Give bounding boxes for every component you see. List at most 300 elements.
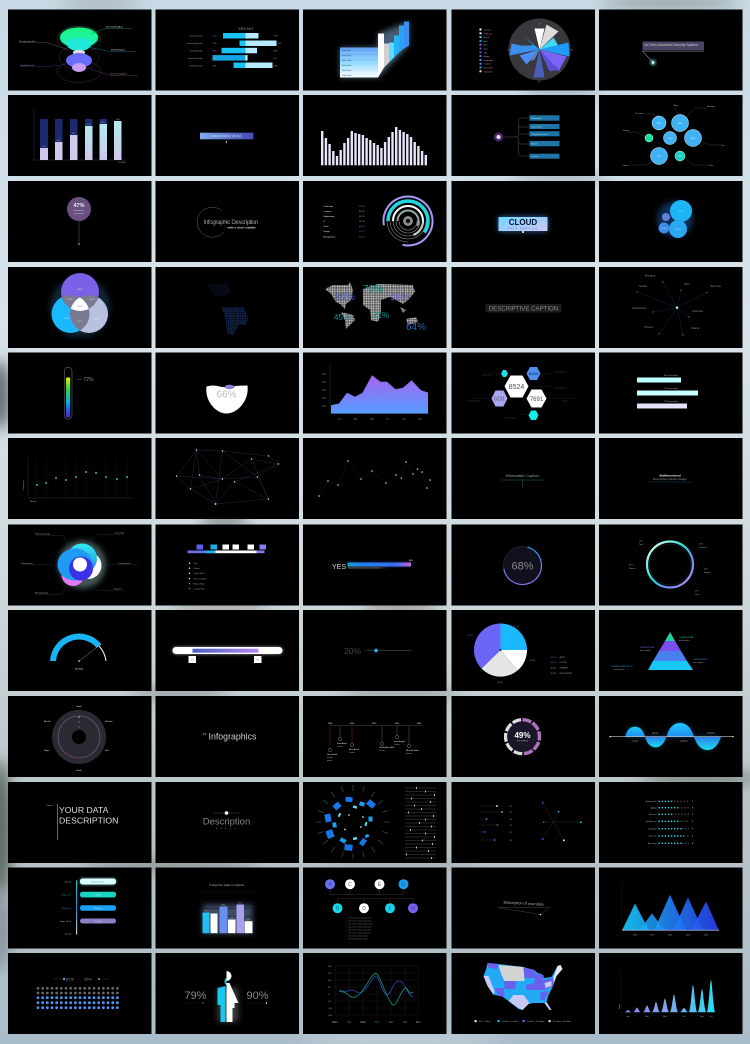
- table: Data Point: [342, 74, 352, 77]
- month labels: Oct: [709, 1015, 713, 1018]
- dot rows: 8: [692, 807, 694, 809]
- pin: Infographics: [74, 210, 84, 212]
- panel: triangle peaks chart: [599, 868, 742, 948]
- percentages: 96%: [390, 292, 410, 303]
- venn: 521.9: [64, 318, 70, 320]
- legend: 36%: [84, 976, 92, 982]
- panel: rose chart: 73: [538, 24, 541, 26]
- month labels: Sep: [700, 1016, 705, 1018]
- labels: 100: [328, 980, 332, 982]
- panel: bubble cluster: [599, 95, 742, 176]
- panel: bubble cluster: 90%: [657, 156, 661, 158]
- panel: rose chart: 88: [570, 50, 574, 52]
- boxes: [530, 115, 560, 159]
- labels: Agility: [651, 806, 656, 809]
- notes: text content: [693, 661, 704, 664]
- axis: Sep: [402, 418, 406, 420]
- pill: [172, 647, 282, 654]
- labels: Thu: [375, 1020, 380, 1024]
- legend: 28.2%: [550, 662, 556, 664]
- captions: Lorem: [379, 750, 385, 752]
- panel: bowl 66%: [156, 352, 299, 434]
- panel: wave chart: [599, 696, 742, 777]
- table: 77.2%: [359, 206, 365, 208]
- bubbles: 61.1%: [675, 229, 681, 231]
- captions: Christopher Mark: [379, 746, 394, 749]
- divider: [56, 804, 58, 840]
- axes: Frequency: [23, 481, 25, 490]
- title: 3 How the sales is shared: [209, 883, 244, 887]
- legend: 5 million - 10 million: [526, 1021, 544, 1023]
- labels: Augmented: [646, 800, 656, 803]
- bar: Growth increases data over this time: [348, 566, 381, 569]
- map: [325, 282, 418, 329]
- tags: 5%: [191, 660, 194, 662]
- bars: 76% description: [664, 400, 678, 403]
- boxes: Internet: [532, 155, 539, 158]
- caption box: 1st Tech Advanced Security System: [644, 43, 698, 47]
- timeline bar: [188, 550, 264, 553]
- needle: 75.5%: [75, 667, 84, 671]
- venn: [52, 273, 108, 333]
- bars: 96%: [116, 119, 120, 121]
- peaks: [622, 895, 719, 936]
- axes: Months: [30, 500, 37, 503]
- bars: 85% description: [664, 374, 678, 377]
- label: YES: [332, 564, 346, 571]
- legend: December: [484, 71, 493, 73]
- axis: 100%: [707, 731, 715, 735]
- axis: Sales: [619, 1004, 621, 1009]
- value: — 72%: [77, 377, 94, 383]
- connectors: [330, 890, 413, 902]
- notes: LOREM IPSUM: [693, 659, 707, 661]
- legend: WOODPRINT: [560, 673, 573, 675]
- callouts: Recycle: [114, 588, 122, 590]
- caption: Multifunctional: [659, 474, 681, 478]
- bars: 39%: [246, 920, 251, 922]
- labels: Fri: [389, 1020, 393, 1024]
- callouts: [21, 532, 138, 594]
- bubbles: 70.2%: [678, 211, 684, 213]
- labels: 200: [328, 966, 332, 968]
- panel: bubble cluster: Text Item: [635, 112, 643, 115]
- thermometer: [64, 367, 72, 419]
- list: Line item of data point six: [348, 932, 371, 934]
- axis: 90%: [652, 731, 658, 735]
- chart: layered ellipses: [57, 26, 101, 82]
- rose wedges: [508, 18, 570, 80]
- bars: 91% description: [664, 387, 678, 390]
- side notes: Lorem ipsum: [554, 370, 566, 374]
- legend: APPS: [560, 656, 566, 659]
- legend: 10 million - 20 million: [552, 1021, 571, 1023]
- captions: Michael Smith: [406, 749, 419, 752]
- list: Line item of data point five: [348, 928, 372, 932]
- bar: 84%: [409, 560, 413, 562]
- legend: [468, 626, 573, 684]
- panel: description of your data: [452, 868, 595, 948]
- nodes: [176, 449, 279, 505]
- labels: Structure: [699, 546, 708, 549]
- table: Finan: [324, 226, 329, 228]
- legend: 10.2%: [550, 673, 556, 675]
- axis: [322, 364, 430, 420]
- list: Line item of data eight: [348, 938, 368, 940]
- panel: rose chart: 67: [538, 82, 541, 84]
- labels: 11%: [704, 568, 708, 570]
- labels with leader lines: 35% Workplace: [111, 50, 126, 52]
- panel: gauge: [8, 610, 152, 691]
- panel: blue bubbles: [599, 181, 742, 262]
- side notes: Lorem text: [482, 374, 492, 376]
- legend: [480, 28, 494, 73]
- panel: scatter line: [303, 438, 446, 519]
- pills: Marketing: [94, 907, 102, 910]
- pin: 47%: [73, 203, 85, 209]
- panel: bubble cluster: Project: [623, 129, 630, 132]
- 3D bars: [378, 22, 409, 78]
- axis: 2005: [350, 723, 355, 725]
- bars: [637, 374, 698, 408]
- bar: [348, 560, 413, 569]
- bars: [321, 127, 427, 165]
- title: Infographics: [208, 732, 257, 742]
- table: Data Point: [342, 54, 352, 57]
- labels with leader lines: 25% Smoking Area: [106, 26, 124, 28]
- nodes: [636, 282, 708, 336]
- legend: 61%: [66, 976, 74, 982]
- pin: [67, 197, 91, 245]
- pyramid: [648, 632, 693, 670]
- axis: [609, 731, 734, 743]
- panel: bubble cluster: Home: [623, 165, 629, 167]
- panel: rose chart: 64: [508, 50, 511, 52]
- table: Production: [324, 205, 333, 208]
- venn: 38.20: [89, 299, 95, 301]
- panel: stacked bar chart: [8, 95, 152, 176]
- list: [189, 562, 207, 590]
- axis: [60, 880, 77, 936]
- question labels: Second Question: [187, 42, 202, 45]
- axis: 0.00: [322, 398, 327, 400]
- dots: • • • • •: [216, 828, 237, 830]
- panel: 49% donut: [452, 696, 595, 777]
- axis: 0.00: [322, 382, 327, 384]
- legend: [474, 1020, 571, 1023]
- panel: YES gradient bar: [303, 524, 446, 606]
- donut: [506, 720, 540, 754]
- percentages: [334, 284, 426, 333]
- question labels: First Question: [190, 34, 202, 38]
- panel: network graph: [156, 438, 299, 519]
- left value: 79%: [184, 990, 207, 1002]
- notes: LOREM IPSUM: [640, 647, 654, 649]
- panel: dotted world map: [303, 267, 446, 348]
- panel: hexagons: [452, 352, 595, 434]
- axis: 2015: [395, 723, 400, 725]
- peaks: 2014: [668, 934, 673, 936]
- question labels: 33%: [212, 66, 217, 68]
- bars: 81%: [86, 124, 91, 126]
- panel: pill list with axis: [8, 868, 152, 948]
- axis: Nov: [418, 418, 422, 420]
- labels: Core: [695, 594, 700, 596]
- city labels: Atlanta: [691, 326, 700, 330]
- labels: Accuracy: [648, 842, 656, 845]
- panel: bubble cluster: Text: [721, 144, 725, 147]
- star: [542, 802, 582, 841]
- circles: D: [362, 906, 366, 912]
- panel: 3D staircase chart: [303, 10, 446, 90]
- legend: 100 - 0 Value: [478, 1021, 491, 1023]
- panel: timeline: [303, 696, 446, 777]
- axis: Growth: [65, 932, 71, 936]
- question labels: 17%: [212, 43, 217, 45]
- bowl: 66%: [216, 390, 237, 400]
- captions: John Smith: [327, 753, 337, 756]
- callouts: Community: [114, 532, 124, 534]
- panel: infographic description: [156, 181, 299, 262]
- labels: -150: [328, 1015, 333, 1017]
- bars: [40, 119, 126, 164]
- axis: 0.00: [322, 374, 327, 376]
- question labels: Fifth Question: [190, 64, 202, 68]
- legend: 30.4%: [550, 668, 556, 670]
- axis: Jan: [338, 418, 341, 420]
- caption: Minimalistic Caption: [506, 474, 539, 478]
- labels with leader lines: Fresh Area 15%: [20, 64, 35, 67]
- circles: C: [348, 882, 352, 888]
- ring: 68%: [511, 560, 534, 572]
- axis: Startup: [65, 880, 72, 884]
- glow: [340, 22, 409, 78]
- panel: bubble cluster: Vote: [709, 164, 714, 167]
- side notes: Lorem ipsum: [468, 400, 480, 402]
- panel: paired bar chart: [156, 868, 299, 948]
- hex cluster: 7691: [530, 397, 544, 403]
- heading: Infographic Description: [204, 219, 259, 226]
- panel: descriptive caption: [452, 267, 595, 348]
- pills: [80, 878, 116, 924]
- panel: gradient ring with labels: [599, 524, 742, 606]
- bowl: [206, 385, 248, 414]
- curves: [339, 974, 413, 1005]
- list: Line item of data point one: [348, 916, 372, 920]
- labels: Sat: [403, 1020, 407, 1024]
- panel: your data description: [8, 782, 152, 863]
- question labels: 33%: [212, 58, 217, 60]
- labels: Engine: [704, 572, 711, 574]
- callouts: Transportation: [118, 562, 131, 565]
- legend: November: [484, 68, 493, 70]
- hub: [494, 132, 503, 142]
- blocks: [324, 797, 376, 851]
- notes: LOREM IPSUM DOLOR: [611, 666, 633, 668]
- circles: [325, 879, 418, 913]
- list: Line item of data point three: [348, 922, 374, 926]
- glow: [50, 277, 110, 337]
- circles: A: [328, 882, 332, 888]
- pills: Hiring: [95, 894, 101, 896]
- area: [331, 375, 428, 414]
- glow: [172, 647, 282, 654]
- axis: 2020: [417, 723, 422, 725]
- panel: overlapping circles with callouts: [8, 524, 152, 606]
- labels: Rail: [105, 750, 109, 752]
- city labels: Seattle: [639, 284, 648, 288]
- tags: [196, 544, 266, 550]
- heading: Caption: [46, 804, 53, 807]
- question labels: 37%: [274, 36, 278, 38]
- labels: Aircraft: [44, 720, 51, 723]
- question labels: 63%: [212, 36, 217, 38]
- legend: August: [484, 55, 490, 58]
- caption: [502, 474, 544, 487]
- bars: 92%: [238, 902, 242, 904]
- list sliders: [405, 787, 436, 859]
- panel: radial star: [599, 267, 742, 348]
- notes: text content: [640, 649, 651, 652]
- question labels: 83%: [278, 43, 282, 45]
- tags: [188, 656, 262, 663]
- caption: Description of your data: [503, 901, 545, 907]
- grid: [37, 457, 127, 498]
- legend: February: [484, 33, 492, 35]
- dot rows: [658, 801, 694, 845]
- waves: [625, 723, 721, 750]
- caption: Descriptive caption design: [653, 477, 687, 481]
- captions: Lorem: [394, 744, 400, 746]
- percentages: 45%: [334, 313, 350, 322]
- label: [498, 217, 548, 233]
- captions: Lion Morgan: [394, 741, 405, 743]
- connector lines: [502, 118, 530, 156]
- value: 20%: [344, 646, 361, 656]
- bubbles: [645, 114, 702, 164]
- panel: nested funnel ellipses: [8, 10, 152, 90]
- list: Line item of data point two: [348, 920, 372, 922]
- legend: 29.4%: [498, 682, 503, 684]
- hex cluster: 6334: [529, 371, 539, 376]
- peaks: 2018: [704, 934, 709, 936]
- legend: 31.2%: [550, 657, 556, 659]
- city labels: New York: [710, 284, 722, 288]
- left rows: 85: [510, 812, 513, 814]
- bars: 27%: [42, 146, 46, 148]
- table: [340, 48, 378, 78]
- pills: Brand Launch: [92, 882, 104, 884]
- table: [324, 205, 365, 238]
- labels: Vehicles: [105, 721, 112, 723]
- subtitle: with a short subtitle: [226, 226, 256, 230]
- panel: dotted Africa map: [156, 267, 299, 348]
- grey rows: [38, 988, 122, 993]
- list: Users on Map: [194, 578, 207, 580]
- panel: venn diagram: [8, 267, 152, 348]
- legend: July: [484, 52, 487, 54]
- labels: South: [76, 769, 82, 772]
- table: 44.2%: [359, 216, 365, 218]
- labels: -100: [328, 1008, 333, 1010]
- list: Line item of data point four: [348, 926, 372, 928]
- leader lines: [627, 108, 721, 165]
- caption: [647, 474, 693, 482]
- pin: percentage: [74, 212, 85, 215]
- peaks: 2012: [650, 934, 655, 936]
- city labels: Montana: [645, 274, 656, 278]
- panel: white bars histogram: [303, 95, 446, 176]
- table: 88.2%: [359, 226, 365, 228]
- axis: May: [370, 418, 374, 420]
- bars: [212, 33, 276, 68]
- dot rows: 8: [692, 843, 694, 845]
- labels: 0: [328, 994, 330, 996]
- captions: Lorem: [337, 746, 343, 748]
- labels with leader lines: Non-Smoking 40%: [19, 41, 36, 43]
- question labels: 33%: [274, 50, 278, 52]
- axis: 2010: [372, 723, 377, 725]
- list: Check Point: [194, 572, 205, 575]
- right value: 90%: [246, 990, 269, 1002]
- labels: Total: [639, 543, 644, 546]
- panel: bubble cluster: 88%: [691, 138, 695, 140]
- pointer: [642, 51, 655, 65]
- label: DATA SERVICE: [508, 227, 538, 231]
- panel: pie chart: [452, 610, 595, 691]
- glow: [218, 988, 238, 1022]
- percentages: 89%: [335, 292, 355, 303]
- map: [484, 963, 562, 1010]
- panel: rose chart: [452, 10, 595, 90]
- notes: text content: [614, 668, 625, 671]
- captions: Lorem: [349, 752, 355, 754]
- line: [319, 461, 430, 496]
- dot rows: 9: [692, 821, 694, 823]
- venn: 373.3: [93, 319, 99, 321]
- panel: infographics title: [156, 696, 299, 777]
- labels: [629, 540, 711, 596]
- panel: spike chart: [599, 953, 742, 1034]
- panel: bubble cluster: 76%: [668, 138, 672, 140]
- table: 41.2%: [359, 231, 365, 233]
- labels: [646, 800, 657, 845]
- labels: Wed: [360, 1020, 366, 1024]
- circles: G: [402, 882, 406, 888]
- labels: 17%: [695, 590, 699, 592]
- labels: Tue: [347, 1020, 352, 1024]
- ring: [500, 543, 545, 588]
- ornament: [214, 811, 240, 815]
- hex cluster: [492, 367, 546, 420]
- panel: yes/no question bars: [156, 10, 299, 90]
- legend: 10.2%: [530, 660, 535, 662]
- panel: sliders and star: [452, 782, 595, 863]
- panel: US map: [452, 953, 595, 1034]
- value: PROGRESS: [517, 740, 529, 742]
- month labels: Jan: [626, 1016, 630, 1018]
- left rows: 35: [510, 840, 513, 842]
- question labels: Third Question: [189, 50, 202, 52]
- table: Management: [324, 236, 336, 238]
- bars: 88%: [101, 122, 105, 124]
- callouts: Mining Energy: [35, 592, 48, 594]
- axis: [34, 110, 126, 160]
- panel: white pill slider: [156, 610, 299, 691]
- ticks: [316, 785, 390, 859]
- labels with leader lines: 21% Outside Areas: [110, 72, 127, 76]
- panel: bubble cluster: Robot: [673, 104, 679, 107]
